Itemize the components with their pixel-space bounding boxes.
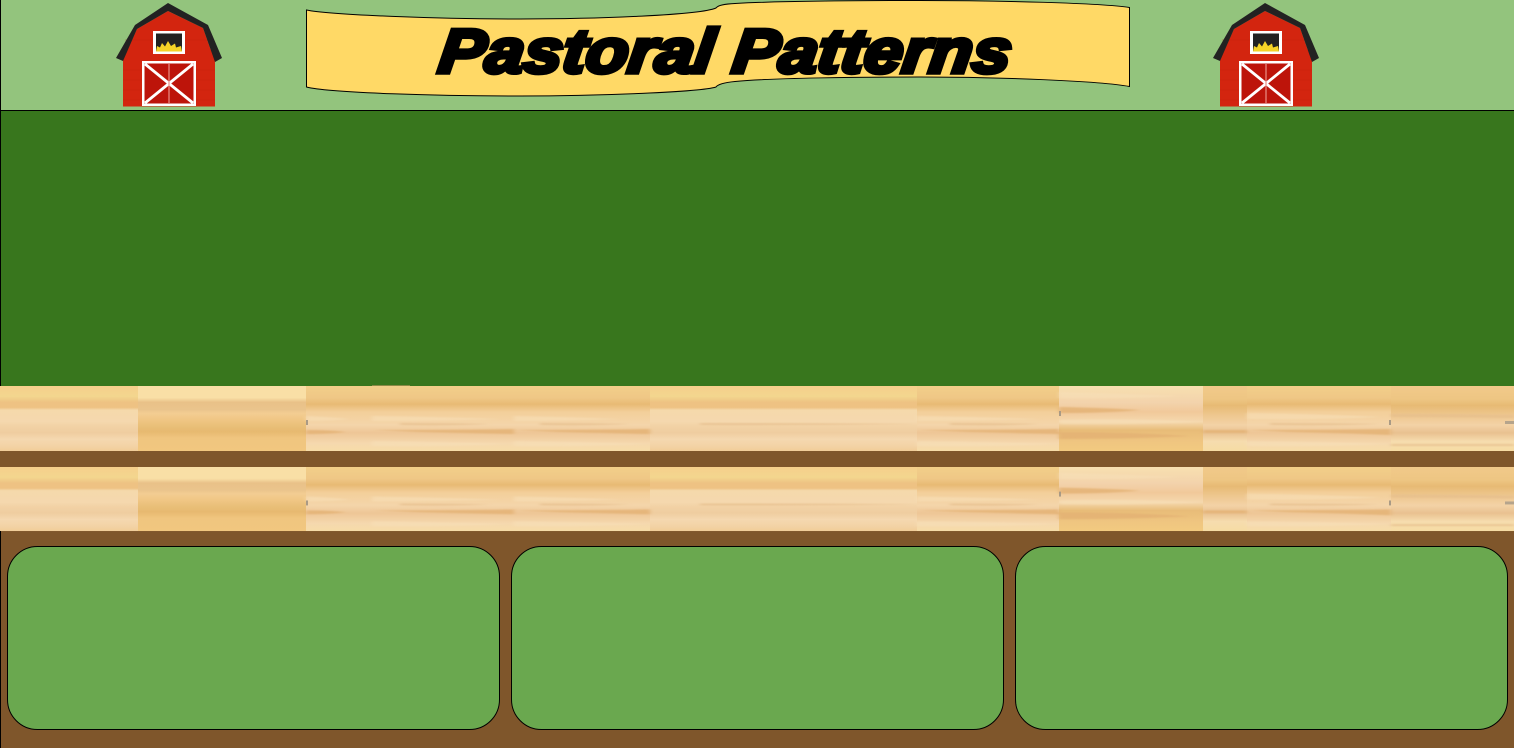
title: Pastoral Patterns (435, 18, 1016, 86)
panel: left (8, 546, 500, 730)
icon: right barn (1213, 3, 1319, 106)
green pasture field (0, 110, 1514, 386)
fence rail top (0, 386, 1514, 451)
banner ribbon (306, 0, 1130, 96)
panel: middle (512, 546, 1004, 730)
icon: left barn (116, 3, 222, 106)
panel: right (1016, 546, 1508, 730)
sky header band (0, 0, 1514, 110)
fence rail bottom (0, 467, 1514, 531)
ground left edge (0, 531, 2, 748)
title banner (306, 0, 1130, 96)
